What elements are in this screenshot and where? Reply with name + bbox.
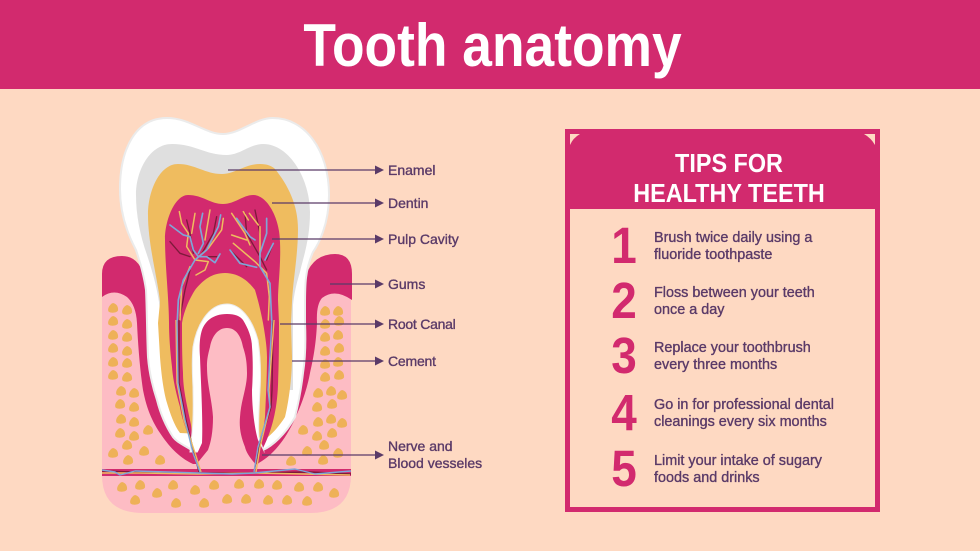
nerve band — [102, 469, 351, 476]
central soft tissue — [195, 328, 257, 466]
number 2: 2 — [611, 272, 637, 329]
crown nerves and vessels — [170, 210, 273, 320]
tip 1 text: fluoride toothpaste — [654, 247, 772, 263]
tip 5 text: foods and drinks — [654, 470, 760, 486]
arrow: enamel — [228, 166, 384, 174]
label: pulp cavity: Pulp Cavity — [388, 231, 459, 247]
panel heading — [570, 134, 875, 209]
bone dots — [108, 303, 347, 508]
number 5: 5 — [611, 440, 637, 497]
tip 3 text — [654, 340, 811, 373]
panel: tips for healthy teeth — [565, 129, 880, 512]
tip 3 text: Replace your toothbrush — [654, 340, 811, 356]
label: nerve and blood vessels: Nerve and — [388, 438, 453, 454]
pulp cavity and root canals — [165, 195, 280, 448]
tip 1 text — [654, 230, 813, 263]
panel heading text: HEALTHY TEETH — [633, 178, 825, 208]
label: nerve and blood vessels — [388, 438, 482, 470]
number 1: 1 — [611, 217, 637, 274]
leader arrows — [228, 166, 384, 460]
panel heading text: TIPS FOR — [675, 148, 783, 178]
tip 2 text: once a day — [654, 302, 724, 318]
arrow: dentin — [272, 198, 384, 208]
jaw bone — [102, 292, 351, 513]
number 4: 4 — [611, 384, 637, 441]
tip 2 — [611, 272, 815, 329]
corner accents — [570, 134, 875, 145]
enamel — [120, 118, 329, 450]
label: enamel: Enamel — [388, 162, 435, 178]
dentin — [148, 164, 298, 437]
title text: Tooth anatomy — [303, 12, 682, 79]
tip 4 text — [654, 397, 834, 430]
inner root white arch — [190, 304, 264, 452]
tip 3 — [611, 327, 811, 384]
tip 1 text: Brush twice daily using a — [654, 230, 812, 246]
inner gum arch — [193, 314, 264, 464]
tip 4 text: Go in for professional dental — [654, 397, 834, 413]
inner dentin arch — [182, 273, 267, 440]
label: gums: Gums — [388, 276, 425, 292]
panel heading text — [633, 148, 825, 208]
tip 4 — [611, 384, 834, 441]
tip 4 text: cleanings every six months — [654, 414, 827, 430]
gums — [102, 254, 352, 464]
label: root canal: Root Canal — [388, 316, 456, 332]
tip 5 text: Limit your intake of sugary — [654, 453, 822, 469]
label: cement: Cement — [388, 353, 436, 369]
arrow: cement — [292, 356, 384, 366]
root nerves — [102, 320, 351, 475]
number 3: 3 — [611, 327, 637, 384]
tip 2 text: Floss between your teeth — [654, 285, 815, 301]
tip 1 — [611, 217, 813, 274]
label: nerve and blood vessels: Blood vesseles — [388, 454, 482, 470]
tip 3 text: every three months — [654, 357, 777, 373]
arrow: gums — [330, 280, 384, 288]
arrow: pulp cavity — [272, 234, 384, 244]
label: dentin: Dentin — [388, 195, 428, 211]
title banner — [0, 0, 980, 89]
tip 5 text — [654, 453, 822, 486]
tip 2 text — [654, 285, 815, 318]
arrow: nerve and blood vessels — [262, 450, 384, 460]
tip 5 — [611, 440, 822, 497]
arrow: root canal — [280, 320, 384, 328]
